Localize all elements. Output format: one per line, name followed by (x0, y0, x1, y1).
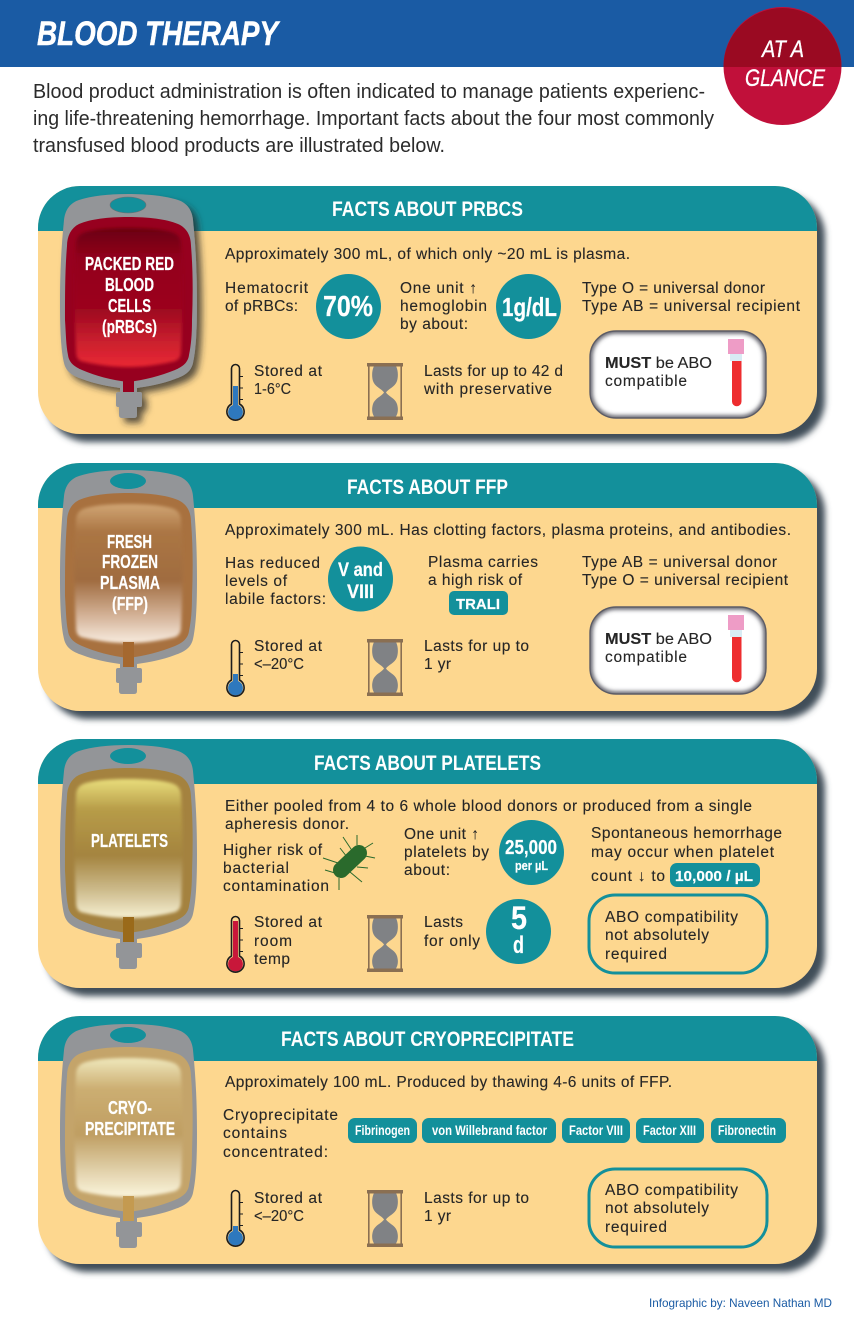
platelet increment fact: per µL (515, 858, 548, 873)
icon: thermometer (227, 640, 244, 696)
pill: von Willebrand factor (422, 1118, 556, 1143)
storage text (254, 1190, 323, 1225)
pill: factor VIII (562, 1118, 630, 1143)
icon: thermometer (227, 916, 244, 972)
pill: fibrinogen: Fibrinogen (355, 1122, 410, 1138)
storage text (254, 914, 323, 968)
bacterial risk text: bacterial (223, 860, 289, 877)
blood bag: fresh frozen plasma: (FFP) (112, 594, 148, 614)
blood bag: fresh frozen plasma: FROZEN (102, 552, 158, 572)
labile factors fact: labile factors: (225, 591, 326, 608)
header band (0, 0, 854, 67)
platelet increment fact: One unit ↑ (404, 826, 479, 843)
hemoglobin fact: One unit ↑ (400, 280, 477, 297)
hemorrhage threshold fact: 10,000 / µL (675, 868, 753, 885)
callout: must be ABO compatible: compatible (605, 649, 687, 666)
hemorrhage threshold fact: may occur when platelet (591, 844, 775, 861)
icon: bacterium (323, 835, 375, 890)
hematocrit fact (225, 274, 381, 339)
storage text: Stored at (254, 914, 323, 931)
TRALI risk fact: TRALI (456, 596, 500, 613)
storage text: room (254, 933, 292, 950)
blood bag: platelets: PLATELETS (91, 831, 168, 851)
platelet increment fact: 25,000 (505, 837, 557, 859)
source statement: apheresis donor. (225, 816, 349, 833)
bacterial risk text: contamination (223, 878, 329, 895)
blood bag: packed red cells: CELLS (108, 296, 151, 316)
callout: must be ABO compatible: compatible (605, 373, 687, 390)
hemorrhage threshold fact: Spontaneous hemorrhage (591, 825, 782, 842)
hematocrit fact: of pRBCs: (225, 298, 298, 315)
hematocrit fact: 70% (323, 291, 373, 323)
icon: thermometer (227, 1190, 244, 1246)
panel: PRBCs (38, 186, 825, 442)
hemorrhage threshold fact (591, 825, 782, 887)
intro text: Blood product administration is often indicated to manage patients experienc- (33, 81, 705, 103)
hemorrhage threshold fact: count ↓ to (591, 868, 665, 885)
pill: fibronectin (711, 1118, 786, 1143)
icon: thermometer (227, 364, 244, 420)
contents label (223, 1107, 338, 1161)
platelet increment fact (404, 820, 564, 885)
platelet increment fact: about: (404, 862, 450, 879)
shelf life fact: for only (424, 933, 480, 950)
badge: at a glance: AT A (760, 36, 804, 63)
blood bag: packed red cells (60, 194, 197, 418)
platelet increment fact: platelets by (404, 844, 489, 861)
blood bag: fresh frozen plasma: FRESH (107, 532, 152, 552)
blood bag: cryoprecipitate: PRECIPITATE (85, 1119, 175, 1139)
icon: hourglass (367, 915, 403, 972)
hemoglobin fact (400, 274, 561, 339)
callout: must be ABO compatible (590, 331, 766, 418)
donor types (582, 554, 789, 589)
contents label: Cryoprecipitate (223, 1107, 338, 1124)
intro text (33, 81, 714, 157)
volume statement: Approximately 100 mL. Produced by thawing 4-6 units of FFP. (225, 1074, 672, 1091)
shelf life text: Lasts for up to 42 d (424, 363, 563, 380)
donor types: Type AB = universal donor (582, 554, 777, 571)
volume statement: Approximately 300 mL, of which only ~20 mL is plasma. (225, 246, 630, 263)
badge: at a glance (724, 7, 842, 125)
blood bag: packed red cells: PACKED RED (85, 254, 174, 274)
TRALI risk fact (428, 554, 538, 615)
storage text: <–20°C (254, 656, 304, 673)
intro text: transfused blood products are illustrated below. (33, 135, 445, 157)
labile factors fact: levels of (225, 573, 288, 590)
storage text: Stored at (254, 363, 323, 380)
storage text: <–20°C (254, 1208, 304, 1225)
labile factors fact: VIII (347, 582, 374, 603)
blood bag: packed red cells: (pRBCs) (102, 317, 157, 337)
intro text: ing life-threatening hemorrhage. Important facts about the four most commonly (33, 108, 714, 130)
pill: factor XIII (636, 1118, 704, 1143)
donor types: Type AB = universal recipient (582, 298, 801, 315)
callout: must be ABO compatible: MUST be ABO (605, 631, 712, 648)
heading: FACTS ABOUT PLATELETS (314, 752, 541, 775)
shelf life text: 1 yr (424, 1208, 451, 1225)
callout: ABO not required: ABO compatibility (605, 1182, 738, 1199)
panel: platelets (38, 739, 825, 996)
panel: FFP (38, 463, 825, 719)
shelf life text: 1 yr (424, 656, 451, 673)
shelf life text: Lasts for up to (424, 1190, 529, 1207)
storage text: Stored at (254, 638, 323, 655)
callout: ABO not required: required (605, 946, 667, 963)
storage text: 1-6°C (254, 381, 291, 398)
blood bag: cryoprecipitate (60, 1024, 197, 1248)
hemoglobin fact: 1g/dL (502, 292, 557, 322)
TRALI risk fact: Plasma carries (428, 554, 538, 571)
blood bag: fresh frozen plasma: PLASMA (100, 573, 160, 593)
badge: at a glance: GLANCE (745, 65, 826, 92)
shelf life text: Lasts for up to (424, 638, 529, 655)
callout: must be ABO compatible: MUST be ABO (605, 355, 712, 372)
shelf life fact (424, 899, 551, 964)
heading: FACTS ABOUT CRYOPRECIPITATE (281, 1028, 574, 1051)
hematocrit fact: Hematocrit (225, 280, 309, 297)
callout: ABO not required: not absolutely (605, 1200, 709, 1217)
hemoglobin fact: by about: (400, 316, 468, 333)
title: BLOOD THERAPY (37, 15, 281, 53)
callout: must be ABO compatible (590, 607, 766, 694)
shelf life text: with preservative (423, 381, 552, 398)
pill: factor XIII: Factor XIII (643, 1122, 696, 1138)
storage text (254, 638, 323, 673)
pill: factor VIII: Factor VIII (569, 1122, 623, 1138)
pill: von Willebrand factor: von Willebrand factor (432, 1122, 547, 1138)
donor types (582, 280, 801, 315)
shelf life text (424, 638, 529, 673)
contents label: concentrated: (223, 1144, 328, 1161)
icon: hourglass (367, 363, 403, 420)
donor types: Type O = universal donor (582, 280, 765, 297)
heading: FACTS ABOUT PRBCS (332, 198, 523, 221)
panel: cryoprecipitate (38, 1016, 825, 1272)
shelf life text (424, 1190, 529, 1225)
storage text (254, 363, 323, 398)
bacterial risk text (223, 842, 329, 895)
labile factors fact: Has reduced (225, 555, 320, 572)
labile factors fact: V and (338, 560, 383, 581)
donor types: Type O = universal recipient (582, 572, 789, 589)
callout: ABO not required: required (605, 1219, 667, 1236)
callout: ABO not required: not absolutely (605, 927, 709, 944)
source statement (225, 798, 752, 833)
callout: ABO not required (589, 895, 767, 973)
shelf life fact: d (513, 932, 524, 959)
blood bag: platelets (60, 745, 197, 969)
pill: fibronectin: Fibronectin (718, 1122, 776, 1138)
pill: fibrinogen (348, 1118, 417, 1143)
callout: ABO not required (589, 1169, 767, 1247)
volume statement: Approximately 300 mL. Has clotting factors, plasma proteins, and antibodies. (225, 522, 791, 539)
icon: hourglass (367, 1190, 403, 1247)
blood bag: packed red cells: BLOOD (105, 275, 154, 295)
hemoglobin fact: hemoglobin (400, 298, 487, 315)
storage text: temp (254, 951, 290, 968)
storage text: Stored at (254, 1190, 323, 1207)
heading: FACTS ABOUT FFP (347, 476, 508, 499)
shelf life fact: 5 (511, 900, 527, 936)
blood bag: cryoprecipitate: CRYO- (108, 1098, 152, 1118)
source statement: Either pooled from 4 to 6 whole blood donors or produced from a single (225, 798, 752, 815)
credit: Infographic by: Naveen Nathan MD (649, 1296, 832, 1310)
TRALI risk fact: a high risk of (428, 572, 523, 589)
shelf life text (423, 363, 563, 398)
icon: hourglass (367, 639, 403, 696)
shelf life fact: Lasts (424, 914, 463, 931)
contents label: contains (223, 1125, 287, 1142)
callout: ABO not required: ABO compatibility (605, 909, 738, 926)
bacterial risk text: Higher risk of (223, 842, 323, 859)
labile factors fact (225, 546, 393, 612)
blood bag: fresh frozen plasma (60, 470, 197, 694)
